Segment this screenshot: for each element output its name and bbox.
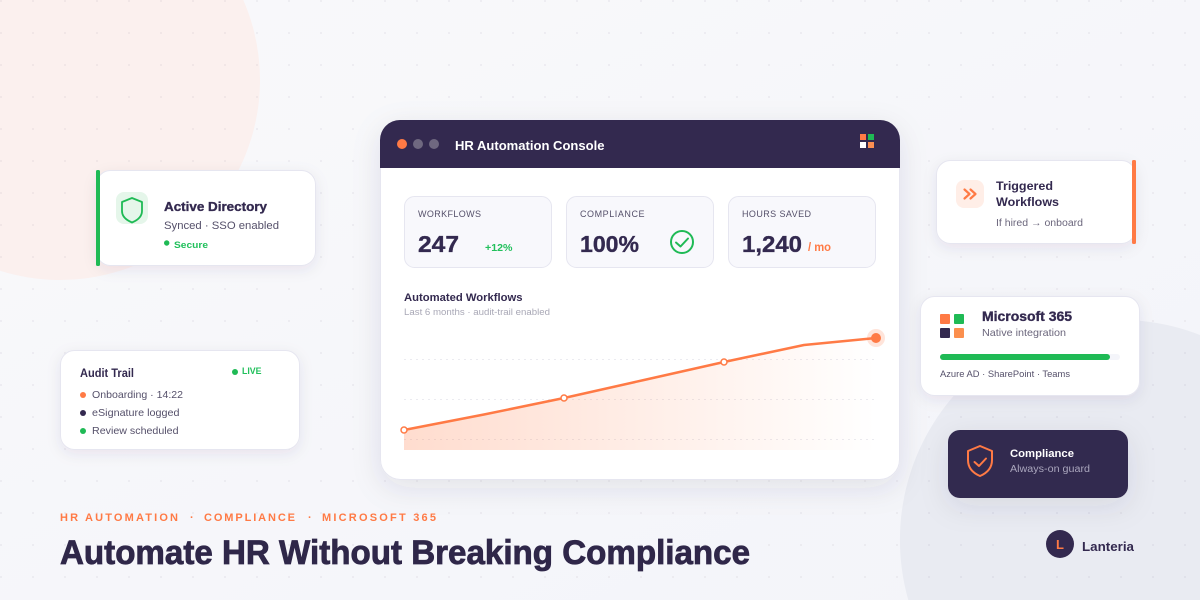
panel: Microsoft 365: Azure AD · SharePoint · Teams [940, 369, 1070, 380]
stat card: hours saved [728, 196, 876, 268]
panel: HR Automation Console [380, 120, 900, 480]
stat card: workflows: 247 [418, 231, 459, 257]
compliance text: Compliance [1010, 448, 1074, 460]
Microsoft 365 text [982, 309, 1073, 339]
stat card: hours saved: HOURS SAVED [742, 209, 812, 219]
chart heading: Last 6 months · audit-trail enabled [404, 307, 550, 317]
panel: Compliance guard [948, 430, 1128, 498]
panel: Audit Trail [60, 350, 300, 450]
icon: shield [116, 192, 148, 224]
audit entries: eSignature logged [92, 407, 180, 419]
Active Directory text: Secure [174, 240, 208, 251]
compliance text [1010, 448, 1090, 475]
Active Directory text [164, 199, 279, 251]
panel: Microsoft 365 [920, 296, 1140, 396]
compliance text: Always-on guard [1010, 464, 1090, 475]
stat card: workflows [404, 196, 552, 268]
stat card: workflows: WORKFLOWS [418, 209, 481, 219]
Triggered Workflows text: Workflows [996, 195, 1059, 209]
icon: microsoft squares [940, 314, 964, 338]
Active Directory text: Synced · SSO enabled [164, 220, 279, 232]
icon: shield check [968, 446, 992, 476]
panel: Audit Trail: Audit Trail [80, 368, 134, 380]
line chart: automated workflows [401, 329, 885, 450]
logo: Lanteria [1046, 530, 1135, 558]
eyebrow tags: · [308, 512, 312, 524]
stat card: hours saved: / mo [808, 242, 831, 254]
audit entries: Onboarding · 14:22 [92, 389, 183, 401]
eyebrow tags: COMPLIANCE [204, 512, 295, 524]
chart heading: Automated Workflows [404, 292, 522, 304]
Microsoft 365 text: Microsoft 365 [982, 309, 1073, 324]
console header bar [380, 120, 900, 168]
Triggered Workflows text: If hired → onboard [996, 218, 1083, 229]
stat card: compliance [566, 196, 714, 268]
eyebrow tags [60, 512, 436, 524]
logo: Lanteria: Lanteria [1082, 539, 1135, 554]
green accent bar [96, 170, 100, 266]
stat card: compliance: COMPLIANCE [580, 209, 644, 219]
live badge [232, 366, 262, 376]
icon: check circle [671, 231, 693, 253]
Triggered Workflows text: Triggered [996, 179, 1053, 193]
audit entries [80, 389, 183, 437]
icon: console app grid [860, 134, 874, 148]
Active Directory text: Active Directory [164, 199, 268, 214]
progress bar [940, 354, 1120, 360]
icon: double chevron [956, 180, 984, 208]
chart heading [404, 292, 550, 317]
live badge: LIVE [242, 366, 262, 376]
Triggered Workflows text [996, 179, 1083, 229]
orange accent bar [1132, 160, 1136, 244]
console title: HR Automation Console [455, 138, 604, 153]
panel: Triggered Workflows [936, 160, 1136, 244]
logo: Lanteria: L [1056, 537, 1064, 552]
eyebrow tags: HR AUTOMATION [60, 512, 178, 524]
stat card: compliance: 100% [580, 231, 639, 257]
title: Automate HR Without Breaking Compliance [60, 534, 750, 572]
audit entries: Review scheduled [92, 425, 179, 437]
stat card: workflows: +12% [485, 242, 513, 254]
Microsoft 365 text: Native integration [982, 327, 1066, 339]
eyebrow tags: MICROSOFT 365 [322, 512, 436, 524]
stat card: hours saved: 1,240 [742, 231, 802, 257]
panel: Active Directory [96, 170, 316, 266]
window controls [397, 139, 439, 149]
eyebrow tags: · [190, 512, 194, 524]
